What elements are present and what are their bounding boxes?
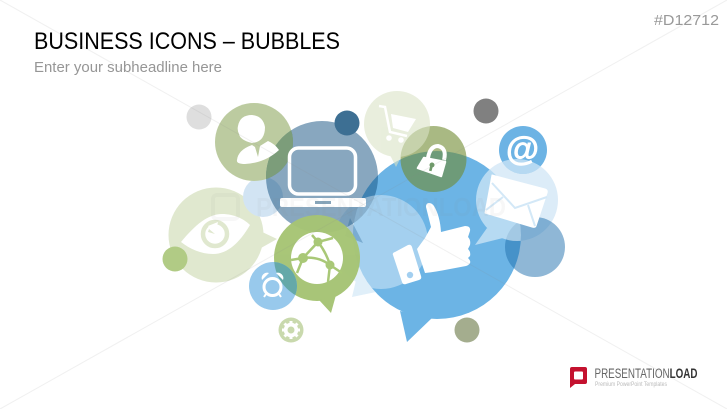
circle: lock [400,126,466,192]
bubble base: pale envelope [475,159,558,245]
overlap: person and laptop [266,130,293,179]
icon: globe [291,232,343,284]
title: BUSINESS ICONS – BUBBLES [34,28,340,55]
bubble: eye [168,188,277,282]
bubble: person [215,103,293,181]
overlay: light-blue bubble [353,195,428,289]
product code: #D12712 [654,12,719,29]
bubble: big blue thumbs up [353,151,521,342]
icon: clock [262,273,283,297]
tail: laptop bubble [345,218,363,243]
logo: PRESENTATIONLOAD [594,366,698,381]
circle: clock [249,262,297,310]
bubble base: pale light-blue [334,195,428,297]
icon: at sign: @ [506,130,539,167]
icon: laptop [280,148,366,207]
logo: Premium PowerPoint Templates [595,381,668,388]
circle: at sign [499,126,547,174]
icon: person [237,115,279,164]
icon: cart [379,106,416,143]
overlay: envelope bubble on blue [475,159,540,245]
circle: pale blue [243,177,283,217]
overlap: clock and globe [274,262,297,295]
bubble: globe [274,215,360,313]
dot: olive [454,318,480,342]
bubble: cart [364,91,430,167]
circle: mid blue [505,217,565,277]
logo [570,366,698,388]
icon: lock [418,146,445,176]
icon: thumbs up [393,203,470,284]
bubble: laptop [266,121,378,233]
dot: dark grey [474,98,498,124]
icon: gear [282,321,300,339]
icon: eye [181,214,250,254]
dot: dark blue [334,110,360,136]
dot: green [162,246,188,272]
watermark: PRESENTATIONLOAD [256,192,506,222]
icon: envelope [485,175,547,227]
subheadline: Enter your subheadline here [34,60,222,76]
circle: gear [278,318,304,342]
dot: grey [186,104,212,130]
